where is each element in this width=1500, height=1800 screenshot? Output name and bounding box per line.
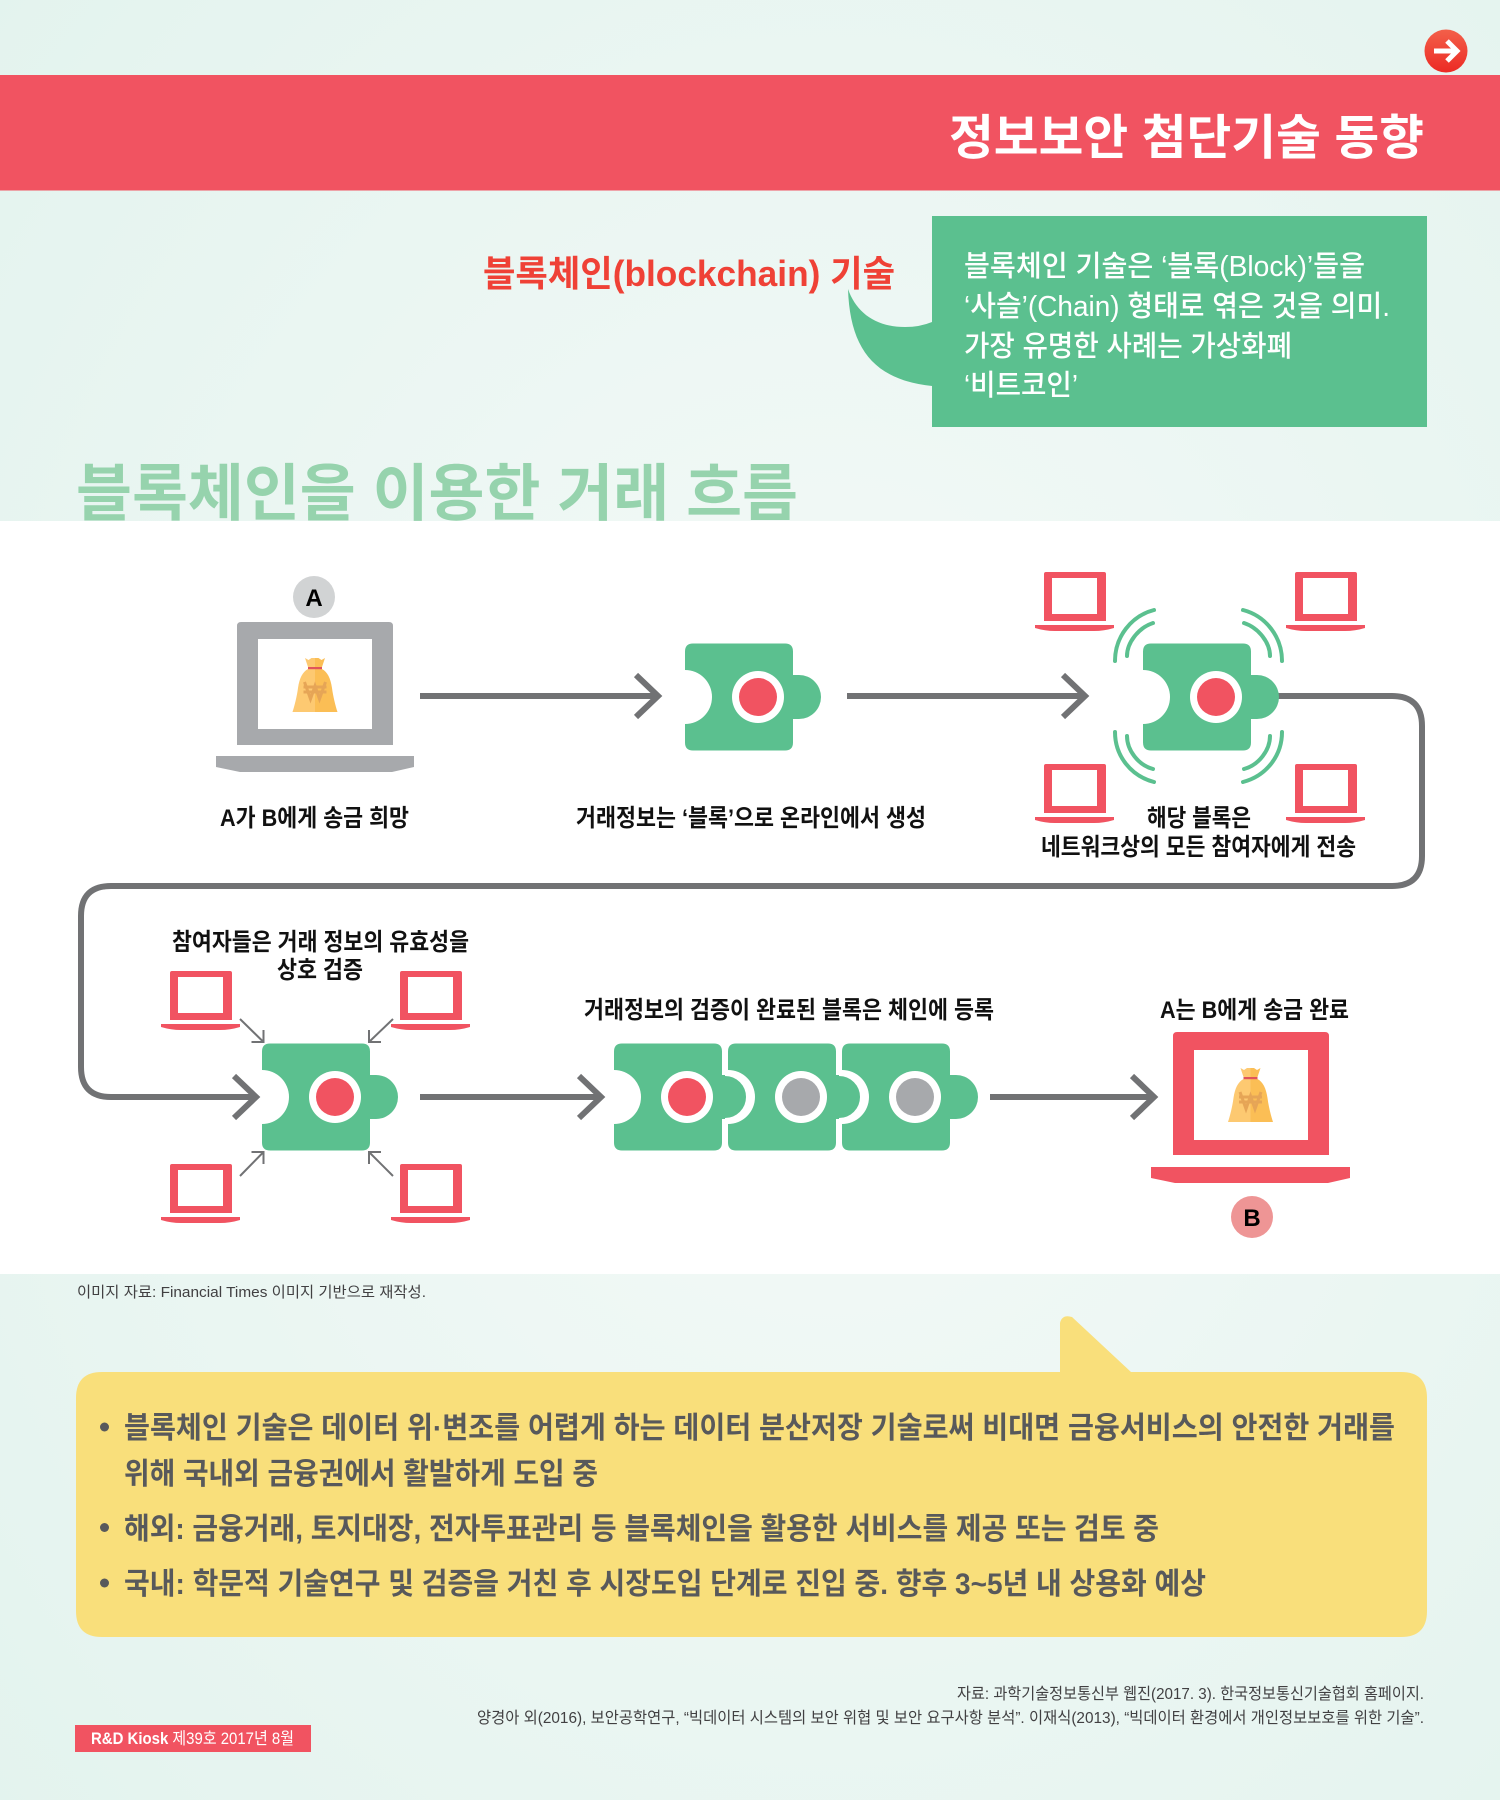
heading: transaction flow: 블록체인을 이용한 거래 흐름 [76, 460, 798, 529]
step 3: broadcast to network: 해당 블록은 [1147, 805, 1251, 832]
panel: yellow summary box: 국내: 학문적 기술연구 및 검증을 거친 후 시장도입 단계로 진입 중. 향후 3~5년 내 상용화 예상 [124, 1568, 1206, 1601]
icon: next arrow [1424, 30, 1468, 72]
panel: yellow summary box [76, 1316, 1427, 1637]
source notes [477, 1685, 1424, 1727]
panel: yellow summary box: 블록체인 기술은 데이터 위·변조를 어렵게 하는 데이터 분산저장 기술로써 비대면 금융서비스의 안전한 거래를 [124, 1412, 1395, 1445]
step 4: participants verify [161, 929, 470, 1223]
callout: blockchain definition: 블록체인 기술은 ‘블록(Block)’들을 [964, 251, 1365, 283]
step 5: block registered in chain [584, 997, 994, 1150]
source notes: 자료: 과학기술정보통신부 웹진(2017. 3). 한국정보통신기술협회 홈페이지. [957, 1685, 1424, 1703]
step 1: sender A laptop: A가 B에게 송금 희망 [220, 805, 409, 832]
heading: blockchain technology: 블록체인(blockchain) 기술 [483, 253, 895, 294]
step 1: sender A laptop: A [305, 585, 323, 612]
callout: blockchain definition: ‘사슬’(Chain) 형태로 엮은 것을 의미. [964, 290, 1390, 323]
callout: blockchain definition [848, 216, 1427, 427]
step 6: receiver B laptop: B [1243, 1205, 1261, 1232]
step 2: block created: 거래정보는 ‘블록’으로 온라인에서 생성 [576, 805, 926, 832]
issue tag: R&D Kiosk 제39호 2017년 8월 [91, 1729, 294, 1748]
header band with title: 정보보안 첨단기술 동향 [949, 112, 1424, 165]
panel: yellow summary box: 해외: 금융거래, 토지대장, 전자투표관리 등 블록체인을 활용한 서비스를 제공 또는 검토 중 [124, 1513, 1159, 1546]
source notes: 양경아 외(2016), 보안공학연구, “빅데이터 시스템의 보안 위협 및 보안 요구사항 분석”. 이재식(2013), “빅데이터 환경에서 개인정보보호를 위한 기술”. [477, 1709, 1424, 1727]
arrow: step 2 to 3 [847, 675, 1085, 717]
step 6: receiver B laptop [1151, 997, 1350, 1238]
panel: flow diagram [0, 521, 1500, 1274]
header band with title [0, 75, 1500, 190]
step 5: block registered in chain: 거래정보의 검증이 완료된 블록은 체인에 등록 [584, 997, 994, 1024]
image source caption: 이미지 자료: Financial Times 이미지 기반으로 재작성. [77, 1284, 426, 1301]
callout: blockchain definition: 가장 유명한 사례는 가상화폐 [964, 330, 1292, 363]
issue tag [75, 1725, 311, 1752]
arrow: loop connector from step 3 to step 4 [81, 696, 1422, 1118]
step 4: participants verify: 참여자들은 거래 정보의 유효성을 [172, 929, 469, 956]
step 4: participants verify: 상호 검증 [277, 957, 363, 984]
panel: yellow summary box: 위해 국내외 금융권에서 활발하게 도입 중 [124, 1458, 598, 1491]
step 3: broadcast to network: 네트워크상의 모든 참여자에게 전송 [1041, 834, 1356, 861]
arrow: step 4 to 5 [420, 1076, 601, 1118]
arrow: step 5 to 6 [990, 1076, 1154, 1118]
step 2: block created [576, 644, 926, 832]
callout: blockchain definition: ‘비트코인’ [964, 369, 1078, 402]
arrow: step 1 to 2 [420, 675, 658, 717]
step 6: receiver B laptop: A는 B에게 송금 완료 [1160, 997, 1349, 1024]
step 1: sender A laptop [216, 576, 414, 832]
step 3: broadcast to network [1035, 572, 1365, 861]
